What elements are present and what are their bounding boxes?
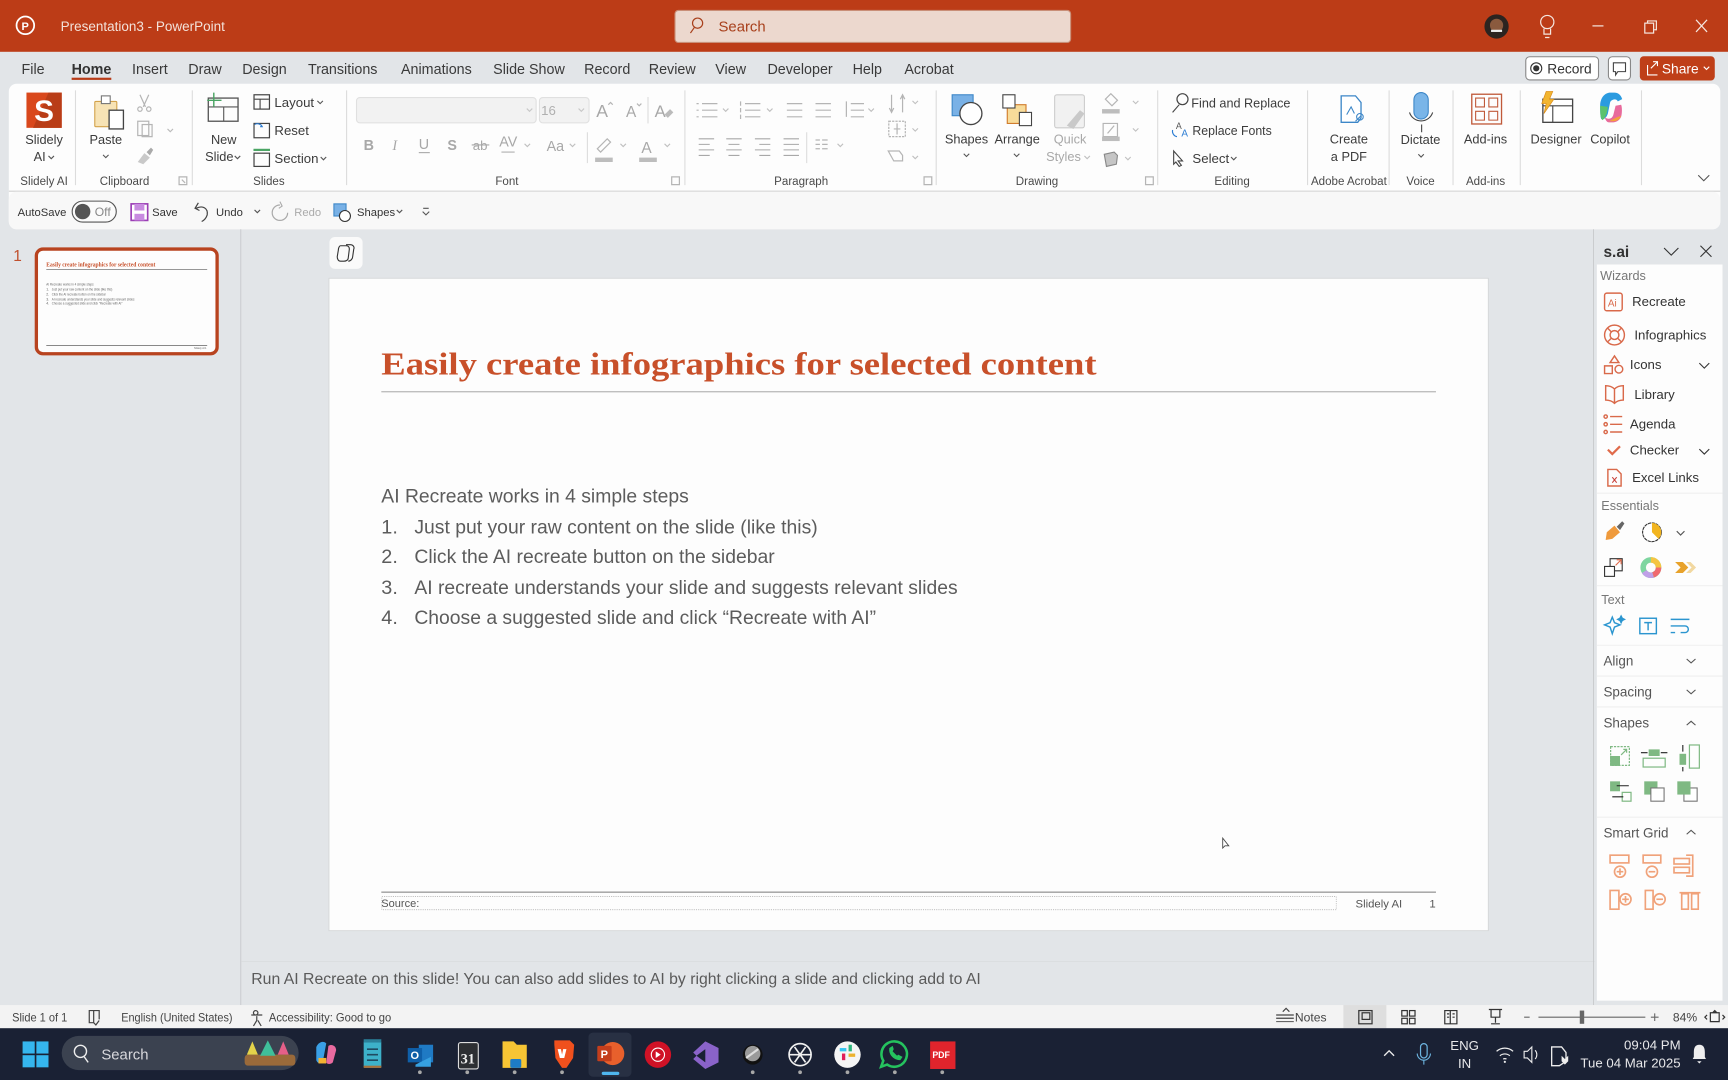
mouse cursor <box>1223 838 1229 848</box>
group: Drawing: Shapes <box>945 131 988 146</box>
section: text <box>1601 593 1689 634</box>
icon: Windows start <box>23 1041 48 1067</box>
taskbar search <box>62 1036 299 1070</box>
slide thumbnail: Easily create infographics for selected content <box>46 263 156 269</box>
group: Slides: Reset <box>274 123 309 138</box>
group: Slides: Section <box>274 151 319 166</box>
Copilot button: Copilot <box>1590 131 1630 146</box>
body text: steps: Click the AI recreate button on the sidebar <box>414 546 775 568</box>
group: Font: Font <box>495 176 519 188</box>
slide thumbnail: 2. <box>46 292 49 296</box>
format painter <box>1606 521 1624 540</box>
status bar <box>0 1005 1728 1028</box>
sidebar: s.ai pane <box>1594 229 1722 1005</box>
group: Add-ins <box>1464 94 1507 188</box>
group: Editing: Find and Replace <box>1191 95 1290 110</box>
share button: Share <box>1662 61 1699 76</box>
group: Font: ab <box>473 138 487 153</box>
library <box>1606 386 1675 403</box>
group: Font: A <box>641 140 652 157</box>
group: Clipboard <box>89 95 187 188</box>
group: Drawing: Drawing <box>1016 176 1058 188</box>
powerpoint active tile <box>588 1033 631 1077</box>
share button <box>1640 56 1715 80</box>
quick access toolbar: AutoSave <box>18 207 66 219</box>
system tray: IN <box>1458 1056 1471 1071</box>
icon: lightbulb <box>1541 15 1554 37</box>
ribbon tabs: Slide Show <box>493 62 565 78</box>
group: Drawing: Quick <box>1054 131 1087 146</box>
group: Font: B <box>364 138 374 154</box>
group: Font <box>357 97 679 188</box>
slide footer: 1 <box>1429 899 1436 911</box>
system tray: Tue 04 Mar 2025 <box>1580 1055 1681 1070</box>
infographics <box>1605 325 1707 345</box>
system tray: ENG <box>1450 1038 1479 1053</box>
quick access toolbar: Redo <box>294 207 321 219</box>
ribbon tabs: Record <box>584 62 630 78</box>
user avatar <box>1484 14 1509 39</box>
slide thumbnail: 3. <box>46 297 49 301</box>
group: Font: S <box>447 138 457 154</box>
recreate <box>1605 293 1686 311</box>
ribbon tabs: View <box>715 62 747 78</box>
group: Adobe Acrobat: Create <box>1330 131 1368 146</box>
group: Adobe Acrobat <box>1311 96 1388 188</box>
section: shapes <box>1603 715 1699 801</box>
group: Font: I <box>391 138 398 154</box>
group: Font: AV <box>499 135 518 151</box>
ribbon tabs: Transitions <box>308 62 377 78</box>
group: Slidely AI: AI <box>34 149 46 164</box>
thumbnail pane divider <box>240 229 242 1005</box>
body text: steps: 3. <box>381 577 398 599</box>
group: Paragraph <box>696 95 932 188</box>
icon: accessibility <box>251 1011 262 1026</box>
section: shapes: Shapes <box>1603 715 1649 730</box>
group: Adobe Acrobat: a PDF <box>1331 149 1367 164</box>
group: Add-ins: Add-ins <box>1466 176 1505 188</box>
group: Clipboard: Clipboard <box>100 176 149 188</box>
powerpoint active tile: P <box>601 1049 608 1061</box>
group: Paragraph: Paragraph <box>774 176 828 188</box>
slide thumbnail <box>36 249 217 354</box>
running app indicators <box>418 1070 944 1074</box>
group: Slides: Slides <box>253 176 285 188</box>
group: Drawing: Styles <box>1046 149 1081 164</box>
pinned apps: O <box>411 1050 420 1062</box>
ribbon tabs: Draw <box>188 62 222 78</box>
speaker notes: Run AI Recreate on this slide! You can also add slides to AI by right clicking a slide and clicking add to AI <box>251 971 981 988</box>
notes toggle: Notes <box>1295 1011 1327 1025</box>
taskbar search: Search <box>101 1048 148 1064</box>
Designer button: Designer <box>1531 131 1582 146</box>
slide thumbnail: 1. <box>46 287 49 291</box>
checker <box>1608 443 1709 458</box>
icons: Icons <box>1630 357 1662 372</box>
agenda <box>1604 415 1676 434</box>
collapsed sections: Spacing <box>1603 684 1652 699</box>
group: Voice: Voice <box>1406 176 1435 188</box>
ribbon tabs <box>22 62 954 80</box>
recreate: Ai <box>1608 298 1617 309</box>
excel links: Excel Links <box>1632 470 1699 485</box>
notes toggle <box>1276 1008 1327 1025</box>
system tray: 09:04 PM <box>1624 1038 1681 1053</box>
group: Editing <box>1172 94 1290 188</box>
body text: steps: 4. <box>381 607 398 629</box>
ribbon panel <box>9 84 1720 229</box>
slide thumbnail: Just put your raw content on the slide (like this) <box>52 287 112 291</box>
group: Editing: Select <box>1192 151 1229 166</box>
ribbon tabs: Home <box>72 62 111 78</box>
body text: steps: Just put your raw content on the slide (like this) <box>414 516 818 538</box>
group: Voice: Dictate <box>1401 132 1440 147</box>
collapsed sections <box>1603 654 1695 699</box>
zoom control <box>1524 1011 1725 1025</box>
quick access toolbar: Shapes <box>357 207 396 219</box>
resize <box>1605 559 1622 576</box>
pinned apps: PDF <box>932 1050 951 1060</box>
slide number label: 1 <box>13 248 22 265</box>
ribbon tabs: Review <box>649 62 696 78</box>
slide thumbnail: AI Recreate works in 4 simple steps <box>46 282 94 286</box>
group: Font: Aa <box>547 139 564 155</box>
colour wheel <box>1643 560 1659 575</box>
comments button <box>1608 57 1630 80</box>
taskbar <box>0 1028 1728 1080</box>
body text: steps: Choose a suggested slide and click “Recreate with AI” <box>414 607 876 629</box>
quick access toolbar: Off <box>95 205 111 219</box>
slide canvas <box>329 278 1488 931</box>
quick access toolbar: Save <box>152 207 178 219</box>
status bar: Accessibility: Good to go <box>269 1011 391 1025</box>
document title: Presentation3 - PowerPoint <box>61 18 225 34</box>
infographics: Infographics <box>1634 327 1707 342</box>
group: Slides: Layout <box>274 95 314 110</box>
record button: Record <box>1547 61 1592 76</box>
group: Slidely AI: S <box>34 95 54 128</box>
body text: steps: 1. <box>381 516 398 538</box>
copilot floating button <box>330 237 363 269</box>
slide footer: Source: <box>381 898 419 910</box>
group: Voice <box>1401 93 1440 188</box>
icon: PowerPoint logo: P <box>21 21 29 33</box>
pie tool <box>1643 523 1661 542</box>
group: Drawing: Arrange <box>994 131 1040 146</box>
section: text: Text <box>1601 593 1625 607</box>
slide thumbnail: AI recreate understands your slide and suggests relevant slides <box>52 297 135 301</box>
slide footer <box>381 892 1436 911</box>
group: Font: U <box>419 137 429 153</box>
recreate: Recreate <box>1632 294 1686 309</box>
ribbon tabs: Developer <box>767 62 833 78</box>
search box <box>675 10 1071 42</box>
collapsed sections: Align <box>1603 654 1633 669</box>
slide thumbnail: Choose a suggested slide and click “Recreate with AI” <box>52 302 123 306</box>
ribbon tabs: Animations <box>401 62 472 78</box>
slide title: Easily create infographics for selected content <box>381 347 1097 382</box>
quick access toolbar: Undo <box>216 207 243 219</box>
section: essentials <box>1601 499 1696 576</box>
section: essentials: Essentials <box>1601 499 1659 513</box>
group: Font: A <box>596 101 608 121</box>
title bar <box>0 0 1728 52</box>
section: wizards <box>1600 269 1709 486</box>
group: Slidely AI: Slidely AI <box>20 176 68 188</box>
excel links <box>1608 469 1699 486</box>
checker: Checker <box>1630 443 1680 458</box>
body text: steps: AI Recreate works in 4 simple steps <box>381 486 689 508</box>
sidebar header: s.ai <box>1603 244 1629 261</box>
group: Slidely AI: Slidely <box>25 132 63 147</box>
ribbon tabs: File <box>22 62 45 78</box>
agenda: Agenda <box>1630 417 1676 432</box>
group: Editing: A <box>1181 129 1188 140</box>
ribbon tabs: Design <box>242 62 287 78</box>
group: Slides: Slide <box>205 149 234 164</box>
quick access toolbar <box>18 201 429 222</box>
body text: steps <box>381 486 958 629</box>
group: Slides <box>205 93 326 188</box>
chevrons <box>1675 562 1696 573</box>
group: Slides: New <box>211 132 237 147</box>
pinned apps: 31 <box>461 1051 475 1067</box>
group: Font: A <box>626 104 637 121</box>
slide thumbnail: Slidely AI <box>194 346 205 350</box>
group: Editing: Editing <box>1214 176 1250 188</box>
system tray <box>1384 1038 1706 1071</box>
sidebar header <box>1603 244 1711 261</box>
group: Clipboard: Paste <box>89 132 122 147</box>
window controls <box>1592 20 1707 33</box>
ribbon tabs: Acrobat <box>904 62 954 78</box>
search box: Search <box>719 19 766 35</box>
body text: steps: AI recreate understands your slide and suggests relevant slides <box>414 577 958 599</box>
icon: PowerPoint logo <box>17 17 34 34</box>
icon: spelling book <box>89 1011 99 1025</box>
section: smart grid: Smart Grid <box>1603 826 1668 841</box>
body text: steps: 2. <box>381 546 398 568</box>
slide thumbnail: 4. <box>46 302 49 306</box>
pinned apps <box>316 1033 955 1077</box>
group: Slidely AI <box>20 93 68 188</box>
group: Drawing <box>945 94 1153 188</box>
status bar: English (United States) <box>121 1011 233 1025</box>
status bar: Slide 1 of 1 <box>12 1011 67 1025</box>
group: Add-ins: Add-ins <box>1464 131 1507 146</box>
slide footer: Slidely AI <box>1356 899 1402 911</box>
group: Editing: A <box>1176 121 1182 131</box>
record button <box>1526 57 1599 80</box>
group: Adobe Acrobat: Adobe Acrobat <box>1311 176 1388 188</box>
slide thumbnail: 1 <box>205 346 207 350</box>
library: Library <box>1634 387 1675 402</box>
section: wizards: Wizards <box>1600 269 1646 283</box>
Designer button <box>1531 91 1582 146</box>
view buttons <box>1343 1005 1502 1028</box>
zoom control: 84% <box>1673 1011 1697 1025</box>
icons <box>1605 356 1709 374</box>
group: Font: A <box>655 102 666 121</box>
group: Editing: Replace Fonts <box>1192 123 1272 138</box>
ribbon tabs: Help <box>853 62 882 78</box>
ribbon tabs: Insert <box>132 62 168 78</box>
group: Font: 16 <box>541 103 556 118</box>
Copilot button <box>1590 93 1630 146</box>
section: smart grid <box>1603 826 1700 909</box>
slide thumbnail: Click the AI recreate button on the sidebar <box>52 292 106 296</box>
